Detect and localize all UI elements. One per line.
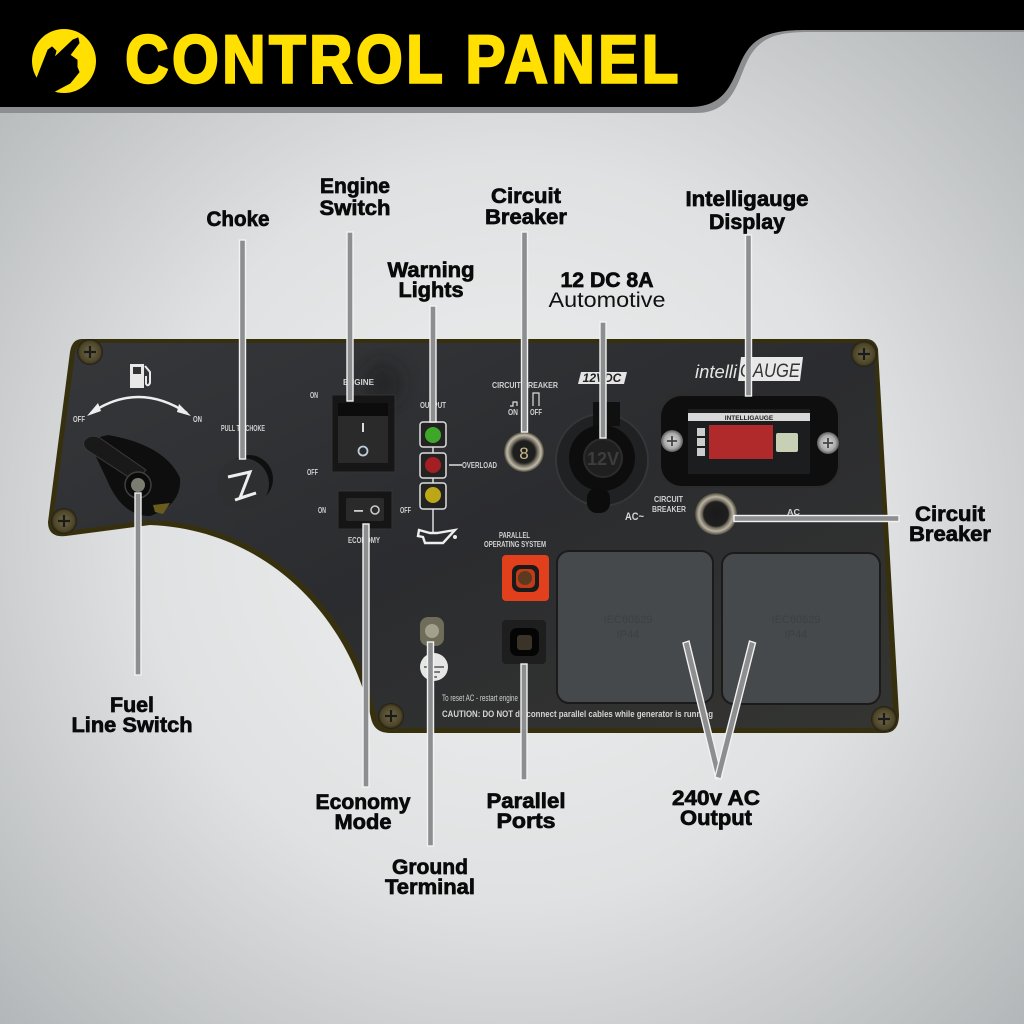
engine switch: OFF	[307, 468, 318, 477]
label: parallel ports: Parallel	[486, 790, 566, 813]
12V socket: 12V	[587, 449, 619, 469]
caution text	[442, 693, 713, 720]
label: 240v AC output: 240v AC	[672, 787, 760, 810]
right circuit breaker	[652, 493, 800, 535]
label: ground terminal: Terminal	[385, 876, 475, 899]
label: ground terminal: Ground	[392, 856, 468, 879]
label: intelligauge display: Intelligauge	[686, 188, 808, 211]
label: 240v AC output	[672, 787, 760, 830]
panel: generator control panel	[48, 339, 899, 733]
AC outlet covers	[557, 551, 880, 704]
label: warning lights: Lights	[398, 279, 464, 302]
label: 12 DC 8A automotive: Automotive	[548, 289, 666, 312]
12V socket: AC~	[625, 511, 644, 523]
left circuit breaker: OFF	[530, 408, 542, 417]
leader lines	[135, 232, 899, 846]
label: fuel line switch: Line Switch	[72, 714, 192, 737]
engine switch: ON	[310, 391, 318, 400]
icon: fuel pump and arc	[73, 364, 202, 424]
label: parallel ports: Ports	[496, 810, 556, 833]
label: engine switch: Switch	[320, 197, 390, 220]
label: intelligauge display: Display	[709, 211, 785, 234]
choke knob: PULL TO CHOKE	[221, 424, 265, 433]
label: 12 DC 8A automotive: 12 DC 8A	[560, 269, 654, 292]
economy switch: ECONOMY	[348, 536, 381, 545]
engine switch	[307, 378, 395, 477]
label: warning lights	[388, 259, 474, 302]
AC outlet covers: IP44	[785, 629, 807, 641]
label: circuit breaker right: Circuit	[915, 503, 985, 526]
label: ground terminal	[385, 856, 475, 899]
intelligauge display: INTELLIGAUGE	[725, 415, 774, 422]
icon: logo	[28, 29, 96, 97]
warning lights: OUTPUT	[420, 401, 446, 410]
caution text: To reset AC - restart engine	[442, 693, 518, 703]
label: circuit breaker right: Breaker	[909, 523, 991, 546]
label: warning lights: Warning	[388, 259, 474, 282]
label: engine switch: Engine	[320, 175, 390, 198]
icon: oil can	[418, 530, 457, 543]
label: economy mode: Mode	[334, 811, 392, 834]
label: 12 DC 8A automotive	[548, 269, 666, 312]
warning lights: OVERLOAD	[462, 461, 497, 470]
left circuit breaker	[492, 381, 558, 472]
12V socket	[556, 371, 648, 523]
label: circuit breaker top: Circuit	[491, 185, 561, 208]
choke knob	[217, 424, 273, 510]
right circuit breaker: CIRCUIT	[654, 495, 683, 504]
parallel ports: OPERATING SYSTEM	[484, 540, 546, 549]
label: parallel ports	[486, 790, 566, 833]
economy switch	[318, 491, 411, 545]
intelligauge display	[660, 357, 839, 487]
label: fuel line switch: Fuel	[110, 694, 154, 717]
label: fuel line switch	[72, 694, 192, 737]
fuel line knob	[84, 435, 180, 516]
AC outlet covers: IEC60529	[772, 614, 820, 626]
parallel ports	[484, 531, 549, 664]
left circuit breaker: ON	[508, 408, 518, 417]
economy switch: OFF	[400, 506, 411, 515]
label: circuit breaker top	[485, 185, 567, 229]
12V socket: 12VDC	[583, 371, 622, 385]
caution text: CAUTION: DO NOT disconnect parallel cables while generator is running	[442, 709, 713, 720]
label: engine switch	[320, 175, 390, 220]
icon: fuel pump and arc: OFF	[73, 415, 85, 424]
warning lights	[418, 401, 497, 543]
screws	[51, 339, 897, 732]
label: choke: Choke	[206, 208, 270, 231]
label: circuit breaker right	[909, 503, 991, 546]
icon: fuel pump and arc: ON	[193, 415, 202, 424]
AC outlet covers: IP44	[617, 629, 639, 641]
label: 240v AC output: Output	[680, 807, 752, 830]
left circuit breaker: CIRCUIT BREAKER	[492, 381, 558, 390]
ground terminal	[420, 617, 448, 681]
AC outlet covers: IEC60529	[604, 614, 652, 626]
label: circuit breaker top: Breaker	[485, 206, 567, 229]
label: economy mode	[316, 791, 411, 834]
label: economy mode: Economy	[316, 791, 411, 814]
intelligauge display: GAUGE	[740, 361, 800, 382]
title: CONTROL PANEL	[125, 21, 682, 97]
economy switch: ON	[318, 506, 326, 515]
header banner	[0, 0, 1024, 113]
smudge near engine switch	[363, 360, 403, 408]
intelligauge display: intelli	[695, 362, 738, 382]
left circuit breaker: 8	[519, 444, 529, 463]
label: intelligauge display	[686, 188, 808, 234]
engine switch: ENGINE	[343, 378, 375, 387]
right circuit breaker: AC	[787, 508, 800, 517]
labels	[72, 175, 991, 899]
parallel ports: PARALLEL	[499, 531, 530, 540]
right circuit breaker: BREAKER	[652, 505, 686, 514]
